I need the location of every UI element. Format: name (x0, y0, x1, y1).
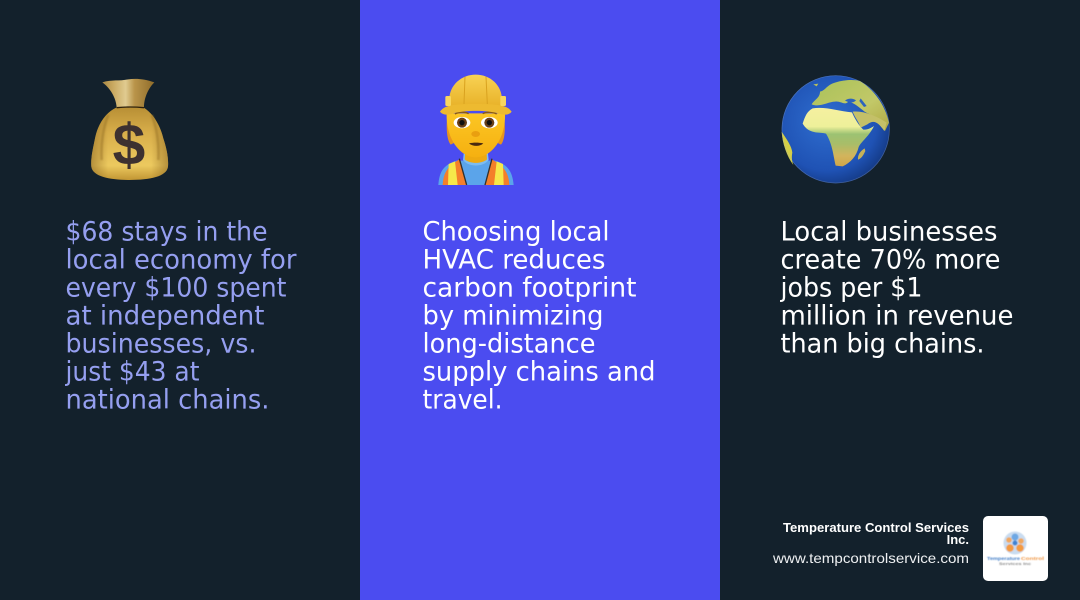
text: carbon footprint statement: supply chains and (422, 356, 656, 388)
text: local economy statistic: every $100 spent (66, 272, 286, 304)
logo text (987, 556, 1044, 566)
text: carbon footprint statement: travel. (422, 384, 502, 416)
logo card (983, 516, 1048, 581)
text: local economy statistic: $68 stays in the (66, 216, 268, 248)
text: company name and website (772, 520, 969, 566)
icon: globe showing Europe and Africa (782, 75, 890, 183)
text: carbon footprint statement: by minimizing (422, 300, 604, 332)
text: carbon footprint statement: HVAC reduces (422, 244, 606, 276)
icon: money bag (91, 79, 168, 180)
text: local economy statistic (65, 216, 297, 416)
text: jobs statistic: Local businesses (780, 216, 998, 248)
text: local economy statistic: just $43 at (65, 356, 199, 388)
text: company name and website: www.tempcontrolservice.com (772, 550, 969, 566)
text: carbon footprint statement: long-distance (422, 328, 596, 360)
text: local economy statistic: at independent (66, 300, 264, 332)
logo mark (1004, 532, 1026, 554)
panel: right background (720, 0, 1080, 600)
text: company name and website: Inc. (947, 532, 969, 547)
logo text: Temperature (987, 556, 1021, 561)
text: company name and website: Temperature Control Services (783, 520, 969, 535)
icon: construction worker (438, 75, 514, 185)
text: local economy statistic: local economy for (66, 244, 297, 276)
text: local economy statistic: businesses, vs. (66, 328, 256, 360)
text: jobs statistic: jobs per $1 (780, 272, 922, 304)
logo text: Services Inc (999, 562, 1031, 566)
icon: money bag: $ (113, 112, 145, 177)
text: carbon footprint statement: carbon footprint (422, 272, 636, 304)
text: jobs statistic: create 70% more (780, 244, 1000, 276)
text: jobs statistic: million in revenue (780, 300, 1014, 332)
panel: centre background (360, 0, 720, 600)
logo text: Control (1021, 556, 1044, 561)
text: local economy statistic: national chains. (66, 384, 270, 416)
text: carbon footprint statement (422, 216, 656, 416)
panel: left background (0, 0, 360, 600)
text: carbon footprint statement: Choosing local (422, 216, 610, 248)
text: jobs statistic: than big chains. (780, 328, 984, 360)
text: jobs statistic (780, 216, 1014, 360)
